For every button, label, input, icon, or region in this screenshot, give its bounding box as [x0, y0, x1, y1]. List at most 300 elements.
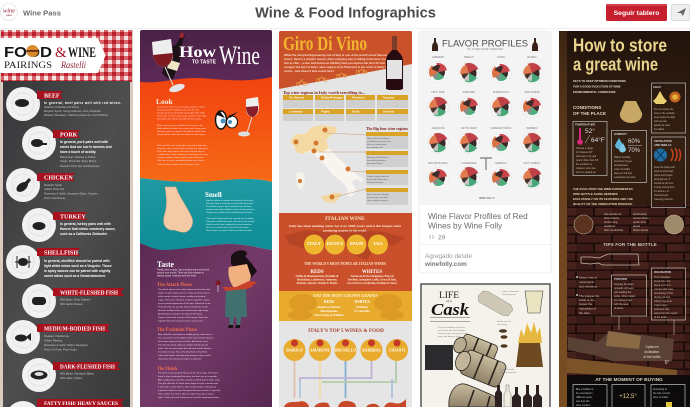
- light box: lighting to read: [654, 124, 670, 127]
- inclination box: damp so it is in: [654, 284, 671, 287]
- title banner: WINE: [68, 45, 96, 61]
- pie row 3: [428, 132, 542, 154]
- tips list: bottle is, the: [579, 298, 595, 302]
- small annotations: the wine over many years and: [438, 332, 468, 335]
- look body text: Hold your glass up against the light and look at the: [157, 130, 207, 133]
- look body text: Look closely and take note of what you find.: [157, 163, 200, 166]
- finish: is pleasant after the wine has gone from your mouth. Do you like: [158, 389, 221, 392]
- dark rack: [425, 345, 453, 370]
- mould text: blown stones: [633, 228, 649, 232]
- wood staves cup: [525, 291, 543, 313]
- mould text: Use wooden or: [604, 212, 622, 216]
- intro text: conquer the best of Italy's wine regions from Piedmont in the north to Sicily in the: [284, 65, 393, 69]
- buying text: Buy a bottles to: [576, 388, 594, 391]
- item: medium-bodied fish: MEDIUM-BODIED FISH: [44, 326, 105, 332]
- pin: wine flavor profiles card: [419, 31, 551, 273]
- pie labels: TEMPRANILLO: [493, 91, 509, 94]
- board avatar: pass: [6, 13, 13, 17]
- finish: The finish is how long the flavour of the wine stays. The wine's: [158, 372, 219, 374]
- small annotations: an ancient one that changes: [438, 329, 466, 332]
- item: beef: Roasted: Bordeaux, California Cabernet, French Rhône: [44, 113, 108, 117]
- big four wine regions: mineral reds and whites: [367, 196, 388, 199]
- italian wine panel: Gavi di Gavi, Verdicchio, Friulano & Soave: [347, 282, 398, 285]
- smell body text: Young wine smells of fruit and old wine of earth.: [206, 211, 253, 214]
- subtitle: [573, 79, 626, 94]
- regions grid: Sardinia: [383, 110, 394, 114]
- tips list: maturation of: [579, 306, 596, 310]
- pie row 2: [428, 96, 542, 118]
- cartoon man tasting wine: [215, 250, 257, 328]
- purple header band: [140, 30, 272, 85]
- title banner: FOOD: [4, 44, 52, 61]
- big four wine regions: best loved Italian wines: [367, 178, 388, 181]
- smell body text: and you may notice different ones as time passes.: [206, 208, 255, 211]
- regions grid: Emilia-Romagna: [321, 96, 343, 100]
- small annotations: for three years: [502, 293, 517, 296]
- evolution phase: Also called the mid palate or middle phase, where this is: [158, 333, 213, 336]
- humidity box: development.: [614, 164, 629, 167]
- cork bark circles: [574, 215, 684, 234]
- big four wine regions: Home of the great Barolo: [367, 137, 390, 140]
- intro text: south... now doesn't that sound nice?: [284, 69, 334, 73]
- position box: Keeping the label: [614, 283, 634, 286]
- wine bottle: [386, 36, 403, 90]
- ventilation box: [652, 137, 686, 208]
- temperature box: 52°: [585, 127, 595, 135]
- title banner: &: [55, 45, 67, 61]
- title: Wine & Food Infographics: [255, 6, 436, 22]
- item: medium-bodied fish: Rosemary & Garlic: Merlot, Sauvignon: [44, 343, 89, 347]
- pie labels: PETIT VERDOT: [524, 163, 541, 165]
- smell body text: Swirl the glass to release the aromas of the wine: [206, 199, 254, 202]
- item: beef: Burgers: Syrah, Young Cabernet, Fruity Zinfandel: [44, 109, 101, 113]
- repin count: [430, 234, 446, 242]
- tips heading: TIPS FOR THE BOTTLE: [603, 242, 658, 248]
- look body text: Take time to notice everything before you drink it.: [157, 159, 205, 162]
- item: dark-fleshed fish: With Glaze: Chianti: [60, 376, 83, 380]
- item: chicken: Rosemary & Garlic: Sauvignon Blanc, Viognier: [44, 192, 98, 196]
- pin: giro di vino: [279, 31, 412, 407]
- ventilation box: smells coming from: [654, 186, 675, 189]
- pie labels: SANGIOVESE: [524, 91, 540, 94]
- humidity box: promotes fungus: [614, 160, 633, 163]
- item: turkey: In general, turkey pairs well with: [60, 222, 111, 226]
- humidity box: dries to cork and: [614, 172, 632, 175]
- ventilation box: Keep the place well: [654, 166, 675, 169]
- item: shellfish: in spicy sauces can be paired with slightly: [44, 269, 111, 273]
- pie labels: CABERNET: [432, 56, 445, 59]
- infographic area: [419, 31, 551, 205]
- item: white-fleshed fish: With Herbs: Muscet: [60, 302, 83, 306]
- ventilation box: chemical and: [654, 194, 669, 197]
- smell body text: [206, 199, 255, 232]
- how to taste wine title: Wine: [219, 41, 260, 70]
- small annotations: [438, 291, 519, 374]
- mould text: metals for: [604, 224, 616, 228]
- conditions heading: [573, 105, 606, 116]
- finish: [157, 367, 221, 399]
- top 5 circles: BARBERA: [362, 348, 381, 352]
- item: pork: PORK: [60, 132, 78, 138]
- pie labels: MERLOT: [464, 57, 474, 59]
- title banner: PAIRINGS: [4, 60, 52, 70]
- item: dark-fleshed fish: DARK-FLESHED FISH: [60, 364, 115, 370]
- buying text: According to: [653, 388, 668, 391]
- item: turkey: such as a California Zinfandel.: [60, 232, 108, 236]
- look body text: Next swirl the wine in the glass and watch legs form: [157, 144, 207, 147]
- finish: a wine with a short finish is often simple. Notice if the flavour: [158, 386, 217, 388]
- top 5 wines and food heading: ITALY'S TOP 5 WINES & FOOD: [308, 328, 384, 334]
- finish: again. That is the end of the process and the beginning of wine.: [158, 396, 220, 399]
- side staves: [499, 329, 508, 348]
- finish: The Finish: [157, 367, 177, 372]
- evolution text: WITH BOTTLE AGING DEPENDS: [573, 192, 618, 196]
- producer circles: ITALY: [307, 241, 322, 246]
- mould text: prefer wine: [633, 220, 646, 224]
- ventilation box: aired to avoid bad: [654, 170, 674, 173]
- temperature box: and keep it up year: [576, 155, 597, 158]
- gingham header: [1, 30, 132, 82]
- top 5 circles: CHIANTI: [389, 348, 406, 352]
- bottle outline: [581, 254, 639, 265]
- orange look band: [140, 77, 272, 182]
- buying text: see how the: [576, 400, 590, 403]
- item: pork: have a touch of acidity.: [60, 150, 96, 154]
- ventilation box: cleaning products.: [654, 198, 674, 201]
- item: beef: [6, 87, 121, 121]
- big four wine regions: fans will find plenty to: [367, 159, 387, 162]
- evolution phase: Good wine has many such layers to discover.: [158, 358, 202, 360]
- position box: POSITION: [614, 277, 627, 281]
- tips list: the wine.: [579, 311, 591, 315]
- position box: of wines.: [614, 307, 624, 310]
- evolution phase: the actual taste on the palate of the wine and the flavours: [158, 336, 214, 340]
- buying section: [567, 375, 690, 407]
- stack of barrels: [449, 333, 507, 407]
- bottles row: [495, 385, 542, 407]
- grapes panel: [279, 291, 412, 321]
- wood edge: [0, 30, 133, 407]
- item: chicken: Grilled: Pinot Noir: [44, 187, 64, 191]
- italian wine panel: Nobile di Montepulciano, Brunello di: [296, 275, 339, 278]
- mould text: Avoid using: [633, 212, 647, 216]
- attack phase: makes on your palate and it is made up of four pieces: [158, 292, 211, 294]
- corkscrew: [480, 158, 492, 170]
- light box: and use low: [654, 120, 667, 123]
- optimum inclination label: inclination: [645, 350, 659, 354]
- producer circles: SPAIN: [350, 241, 364, 246]
- regions grid: Sicily: [352, 110, 360, 114]
- map of italy: [290, 125, 366, 203]
- evolution phase: Look at the layers and how they change in your mouth.: [158, 354, 212, 357]
- conditions heading: CONDITIONS: [573, 105, 601, 110]
- mould text: [604, 212, 650, 232]
- ventilation box: development. It: [654, 178, 671, 181]
- top 5 circles: AMARONE: [310, 348, 330, 352]
- italian wine panel: Montalcino, Lambrusco, Amarone,: [297, 278, 337, 282]
- pie labels: CABERNET FRANC: [490, 127, 512, 130]
- regions grid: Piedmont: [352, 96, 365, 100]
- producer circles: USA: [373, 241, 383, 246]
- board avatar: [0, 4, 18, 20]
- ventilation box: should be far from: [654, 182, 673, 185]
- pie labels: MALBEC: [527, 56, 537, 59]
- buying text: wine evolves: [576, 404, 591, 407]
- item: chicken: Fried: Chardonnay: [44, 196, 66, 200]
- how to taste wine title: [179, 41, 260, 70]
- temperature box: TEMPERATURE: [575, 122, 595, 126]
- life of a cask title: of a: [446, 299, 452, 303]
- attack phase: The attack phase is the initial impression that the wine: [158, 288, 211, 291]
- buying text: different years,: [576, 396, 593, 399]
- buying heading: AT THE MOMENT OF BUYING: [595, 377, 663, 383]
- smell body text: Smell makes up most of what we think we taste.: [206, 229, 253, 232]
- position box: upwards will save: [614, 287, 634, 290]
- look body text: wines take on brick and orange shades at the edge.: [157, 114, 207, 118]
- attack phase: of the puzzle: alcohol, tannin, acidity and residual: [158, 295, 206, 298]
- light box: [652, 83, 686, 133]
- grapes panel: REDS: [324, 300, 334, 304]
- optimum inclination label: Optimum: [645, 345, 659, 349]
- finish: After swallowing, count the seconds until the flavour fades away.: [158, 378, 221, 382]
- subtitle: FOR A GOOD EVOLUTION OF WINE: [573, 84, 621, 88]
- inclination box: letting oxygen in.: [654, 300, 673, 303]
- look body text: to grape variety, climate and the age of the wine.: [157, 156, 204, 159]
- position box: is to hang a sign: [614, 299, 633, 302]
- item: dark-fleshed fish: With Butter: Sauvignon Blanc: [60, 372, 94, 376]
- big four wine regions: Chianti country holds the: [367, 175, 390, 178]
- small annotations: Oak is seasoned: [502, 291, 519, 293]
- title: How to store: [573, 34, 667, 56]
- big bottle on shelf: [567, 331, 677, 379]
- regions heading: Top wine regions in Italy worth travelling to...: [283, 90, 365, 95]
- inclination box: This inclination: [654, 276, 671, 279]
- grapes panel: Sangiovese, Barbera: [317, 306, 341, 309]
- tips list: and vibrations: [579, 284, 598, 288]
- grapes panel: & Catarratto: [354, 310, 370, 313]
- producer circles: FRANCE: [327, 241, 344, 246]
- ventilation box: odors and fungus: [654, 174, 673, 177]
- item: pork: Roasted: Pinot Noir and Burgundy: [60, 164, 100, 168]
- inclination box: INCLINATION: [654, 270, 671, 274]
- smell body text: Oak gives vanilla and toast, with clove and smoke.: [206, 220, 255, 223]
- attack phase: [157, 283, 211, 322]
- mould text: brick shelves.: [604, 216, 620, 220]
- italian wine panel: Vernaccia di San Gimignano, Pinot di: [350, 275, 394, 278]
- pie row 1: [428, 62, 542, 84]
- item: shellfish: [6, 245, 112, 279]
- item: white-fleshed fish: With Butter: Dixie Sulpetre: [60, 298, 91, 302]
- header bar: [0, 4, 690, 29]
- evolution phase: fruit and also spice, tobacco, leather, honey and nut: [158, 344, 208, 346]
- evolution phase: [157, 328, 214, 360]
- follow button: [606, 4, 667, 21]
- regions grid: Lombardy: [289, 110, 303, 114]
- bottles: [432, 38, 538, 51]
- temperature box: round. More than 64°,: [576, 159, 599, 162]
- flavor profiles title: FLAVOR PROFILES: [442, 38, 528, 50]
- temperature box: for instance 52°: [576, 151, 593, 154]
- evolution phase: notes. You can also notice the oak here and its flavours: [158, 347, 212, 350]
- attack phase: together they feel and how intense each one is.: [158, 320, 204, 322]
- wine glass and bottle illustration: [152, 32, 186, 94]
- humidity box: [612, 130, 646, 182]
- look body text: a lighter wine. Colour and texture both give you clues: [157, 153, 209, 156]
- look body text: [157, 106, 209, 166]
- evolution text: THE EVOLUTION THE WINE EXPERIENCES: [573, 187, 633, 191]
- big four wine regions: The Big four wine regions: [366, 126, 408, 131]
- item: dark-fleshed fish: [22, 358, 120, 392]
- grapes panel: AND THE MOST GROWN GRAPES: [313, 293, 378, 298]
- temperature box: Choose a range: [576, 147, 594, 150]
- attack phase: They will show up quickly. Tannin will dry the mouth: [158, 306, 208, 308]
- italian wine panel: Dolcetto, Taurasi, Chianti & Barolo: [297, 282, 338, 285]
- toasted barrel: [516, 322, 543, 367]
- life of a cask title: Cask: [431, 300, 470, 319]
- intro text: has to offer – a tour and luxurious thinking that you explore the Giro Di Vino to: [284, 61, 389, 65]
- life of a cask title: [430, 291, 470, 322]
- italian wine panel: REDS: [310, 270, 324, 275]
- pie labels: PETITE SIRAH: [461, 127, 477, 130]
- pin: how to store a great wine: [559, 31, 690, 407]
- nose: [164, 187, 193, 232]
- item: pork: In general, pork pairs well with: [60, 140, 108, 144]
- life of a cask title: LIFE: [439, 291, 459, 301]
- top 5 circles: [284, 339, 408, 361]
- small annotations: The art of making a barrel is: [438, 326, 466, 329]
- tips list: The stopper the: [579, 294, 600, 298]
- item: pork: Chops: Pinot Noir, Spicy Rhône: [60, 159, 97, 163]
- item: medium-bodied fish: Fried: Go Rosé, Pinot Grigio: [44, 348, 77, 352]
- item: white-fleshed fish: WHITE-FLESHED FISH: [60, 290, 118, 296]
- food silhouettes: [284, 399, 406, 407]
- taste intro: Finally, time to taste. Sip a small amount and hold it: [157, 268, 210, 272]
- top 5 circles: BRUNELLO: [335, 348, 356, 352]
- item: turkey: [22, 208, 116, 242]
- position box: with the area: [614, 303, 629, 306]
- inclination box: keeps the cork: [654, 280, 671, 283]
- chalkboard: [3, 81, 130, 407]
- buying text: wine or bottle: [653, 396, 668, 399]
- title: a great wine: [573, 54, 658, 74]
- intro text: While the vineyard flag-bearing role of Italy is one of the world's most famous wine: [284, 53, 395, 57]
- light box: Do not expose the: [654, 108, 674, 111]
- orange header: [279, 31, 412, 89]
- light box: wine to the sunlight.: [654, 112, 675, 115]
- board owner: Wine Pass: [23, 8, 61, 18]
- title banner: Rastelli: [60, 60, 86, 70]
- big four wine regions: and Barbaresco wines, the: [367, 140, 392, 143]
- item: turkey: flavors that mimic cranberry sauce,: [60, 227, 116, 231]
- italian wine panel: Italy has been making wines for over 2000 years and is the largest wine: [289, 224, 402, 228]
- big four wine regions: hills are a lovely place: [367, 144, 387, 146]
- pin title: Wines by Wine Folly: [428, 222, 503, 230]
- italian wine panel: Trevibbo, Sauvignon Collio, Greco di Tufo,: [347, 278, 397, 282]
- light box: Keep away fire light: [654, 116, 675, 119]
- position box: [612, 275, 646, 316]
- optimum inclination label: [643, 345, 669, 366]
- big four wine regions: for a summer visit.: [367, 146, 384, 149]
- evolution phase: in vanilla or toast. This is the best time to find them.: [158, 350, 208, 354]
- humidity box: Lower humidity: [614, 168, 631, 171]
- look body text: clarity and the tears that run down the inner glass.: [157, 133, 206, 136]
- attack phase: Alcohol gives warmth in the back of the throat.: [158, 312, 203, 316]
- look body text: bottle while red wines lose colour over many years.: [157, 127, 207, 130]
- subtitle: KEYS TO KEEP OPTIMUM CONDITIONS: [573, 79, 626, 83]
- finish: Can you still taste it? Great wines linger for over a minute and: [158, 382, 218, 385]
- board avatar: wine: [3, 8, 15, 14]
- item: shellfish: In general, shellfish should be paired with: [44, 259, 110, 263]
- humidity box: evaporates the wine.: [614, 176, 636, 179]
- cellar lamp: [620, 101, 642, 123]
- pie labels: PINOT NOIR: [431, 92, 445, 94]
- item: turkey: TURKEY: [60, 214, 86, 220]
- tips list: slower the: [579, 302, 593, 306]
- item: pork: wines that are low in tannins and: [59, 145, 112, 149]
- title: [573, 34, 667, 74]
- pie labels: NEBBIOLO: [495, 163, 507, 165]
- attack phase: you an overall impression of the wine, balanced or not.: [158, 302, 211, 305]
- inclination box: [652, 268, 686, 320]
- buying text: +12,5°: [619, 394, 637, 400]
- humidity box: 60%: [628, 139, 641, 145]
- evolution text: [573, 187, 633, 206]
- item: chicken: CHICKEN: [44, 176, 73, 182]
- pie labels: MONTEPULCIANO: [428, 162, 448, 165]
- attack phase: whereas acidity makes your mouth water right away.: [158, 309, 209, 312]
- light box: LIGHT: [653, 85, 661, 89]
- small annotations: Toasted inside: [500, 368, 515, 371]
- temperature box: wet it is spoiled up.: [576, 171, 597, 174]
- pie labels: SYRAH: [497, 56, 505, 59]
- small annotations: gives oak flavours to it: [438, 335, 460, 338]
- item: chicken: Roasted: Syrah: [44, 183, 62, 187]
- pin title: Wine Flavor Profiles of Red: [428, 212, 528, 221]
- pin title: [428, 212, 528, 230]
- inclination box: sediment stay: [654, 308, 670, 311]
- big four wine regions: Etna's volcanic soils give: [367, 193, 390, 196]
- intro text: [284, 53, 397, 73]
- mould text: cement floors,: [633, 216, 650, 220]
- cyclist icons: [296, 69, 367, 86]
- italian wine panel: THE WORLD'S MOST POPULAR ITALIAN WINES: [304, 261, 386, 266]
- grey page: [279, 31, 412, 407]
- wood log: [478, 291, 513, 316]
- taste intro: [157, 268, 210, 278]
- source label: Agregado desde: [425, 253, 472, 260]
- item: beef: BEEF: [44, 94, 60, 100]
- italian wine panel: WHITES: [362, 270, 382, 275]
- light box: the labels.: [654, 128, 665, 131]
- big four wine regions: Amarone and Prosecco: [367, 156, 389, 159]
- evolution text: QUALITY OF THE VINIFICATION PROCESS.: [573, 202, 633, 206]
- italian wine panel: producing country in the world.: [323, 228, 367, 232]
- look heading: Look: [156, 97, 174, 106]
- taste intro: around your mouth. There are three phases to: [157, 272, 205, 274]
- evolution phase: of the wine begin to show red fruit, black fruit, stone: [158, 340, 209, 343]
- producer circles: [304, 234, 388, 254]
- tips list: [576, 276, 600, 315]
- item: medium-bodied fish: Roasted: Chardonnay: [44, 334, 70, 338]
- evolution phase: The Evolution Phase: [157, 328, 198, 333]
- divider: [419, 243, 551, 246]
- look body text: White wines get more golden as they age in the: [157, 124, 204, 127]
- regions grid: Puglia: [321, 110, 330, 114]
- item: white-fleshed fish: [22, 284, 124, 318]
- tips list: Keep it free of: [579, 276, 597, 280]
- temperature box: [573, 122, 607, 176]
- look body text: Thick slow legs point to rich wine and thin legs to: [157, 150, 205, 153]
